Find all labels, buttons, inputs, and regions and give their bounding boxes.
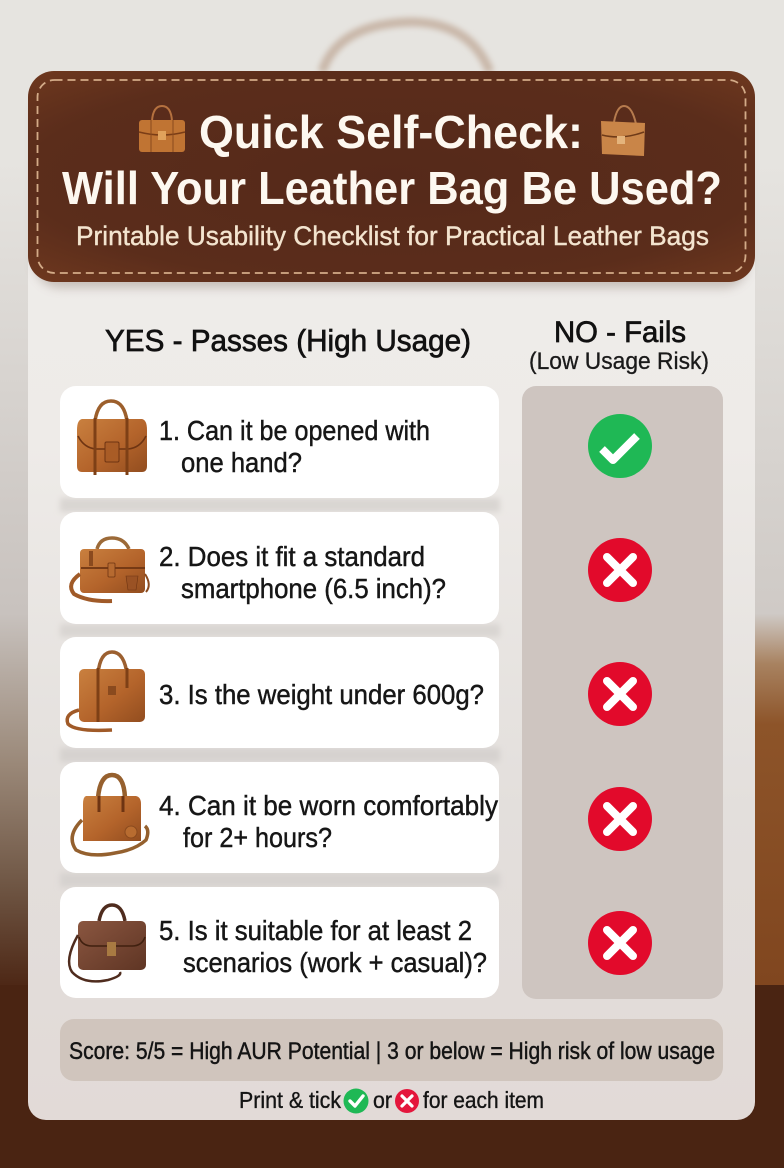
text: question 5: 5. Is it suitable for at least 2 bbox=[159, 915, 472, 946]
icon: bag 1 bbox=[77, 401, 147, 475]
icon: fail cross 5 bbox=[588, 911, 652, 975]
icon: bag 4 bbox=[72, 775, 148, 855]
footer note: Print & tick bbox=[239, 1087, 341, 1113]
text: question 4: for 2+ hours? bbox=[183, 822, 332, 853]
row 2 bbox=[60, 512, 499, 624]
row 3 bbox=[60, 637, 499, 748]
heading: yes column: YES - Passes (High Usage) bbox=[105, 323, 471, 358]
text: score: Score: 5/5 = High AUR Potential | 3 or below = High risk of low usage bbox=[69, 1038, 715, 1065]
icon: small check bbox=[344, 1088, 368, 1114]
row 1 bbox=[60, 386, 499, 498]
subtitle: Printable Usability Checklist for Practical Leather Bags bbox=[76, 221, 709, 251]
icon: fail cross 2 bbox=[588, 538, 652, 602]
heading: no column: (Low Usage Risk) bbox=[529, 348, 709, 375]
heading: no column: NO - Fails bbox=[554, 316, 686, 349]
panel: no column bbox=[522, 386, 723, 999]
text: question 2 bbox=[159, 541, 446, 604]
text: question 2: 2. Does it fit a standard bbox=[159, 541, 425, 572]
text: question 4 bbox=[159, 790, 498, 853]
panel: score bbox=[60, 1019, 723, 1081]
title line 1: Quick Self-Check: bbox=[199, 106, 583, 158]
footer note: for each item bbox=[423, 1087, 544, 1113]
icon: bag 5 bbox=[69, 905, 146, 981]
row 5 bbox=[60, 887, 499, 998]
icon: bag 3 bbox=[67, 652, 145, 730]
icon: bag 2 bbox=[71, 538, 149, 601]
text: question 5 bbox=[159, 915, 487, 978]
icon: fail cross 4 bbox=[588, 787, 652, 851]
footer note bbox=[239, 1087, 544, 1114]
icon: small cross bbox=[395, 1089, 419, 1113]
footer note: or bbox=[373, 1087, 392, 1113]
icon: bag left bbox=[139, 106, 185, 152]
title line 2: Will Your Leather Bag Be Used? bbox=[62, 162, 722, 214]
icon: fail cross 3 bbox=[588, 662, 652, 726]
text: question 5: scenarios (work + casual)? bbox=[183, 947, 487, 978]
text: question 1: 1. Can it be opened with bbox=[159, 415, 430, 446]
icon: pass check 1 bbox=[588, 414, 652, 478]
text: question 2: smartphone (6.5 inch)? bbox=[181, 573, 446, 604]
row 4 bbox=[60, 762, 499, 873]
text: question 4: 4. Can it be worn comfortably bbox=[159, 790, 498, 821]
text: question 3: 3. Is the weight under 600g? bbox=[159, 679, 484, 710]
icon: bag right bbox=[601, 106, 645, 156]
heading: no column bbox=[529, 316, 709, 375]
panel: leather header bbox=[28, 71, 755, 282]
text: question 1 bbox=[159, 415, 430, 478]
header shadow bbox=[34, 88, 749, 288]
text: question 1: one hand? bbox=[181, 447, 302, 478]
